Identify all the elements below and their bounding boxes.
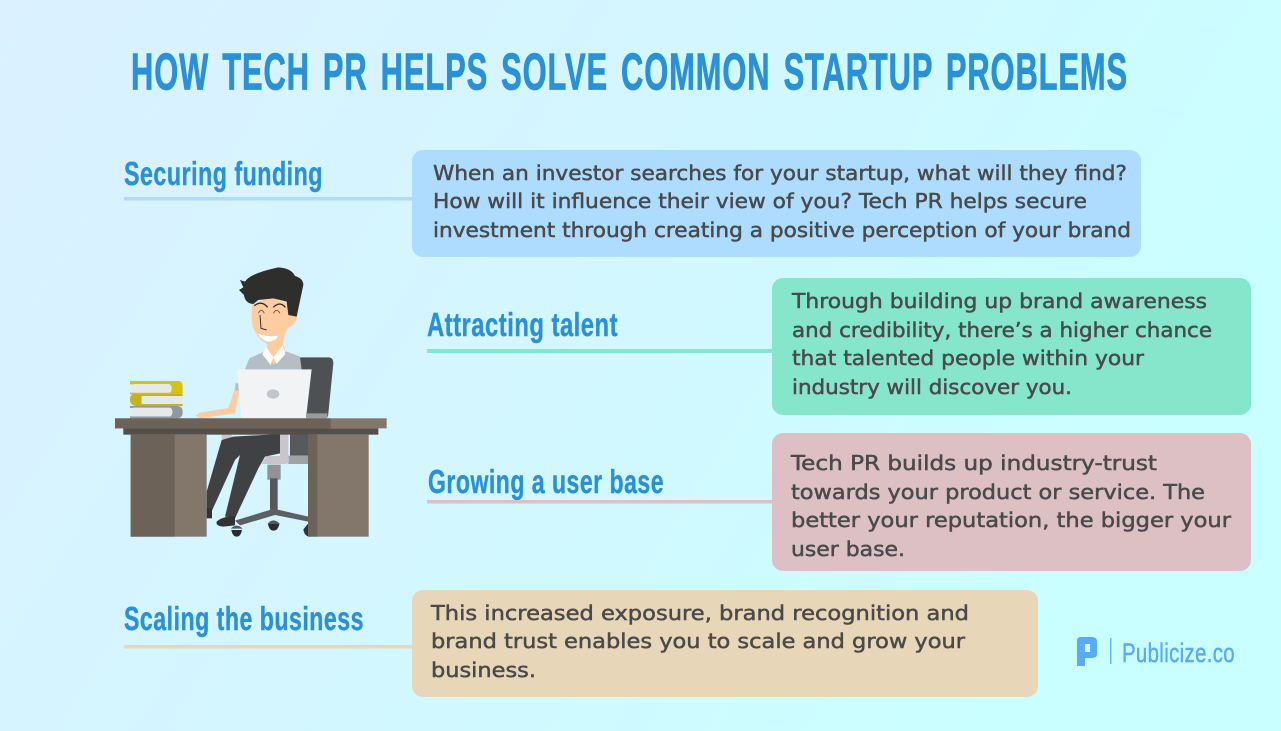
box: attracting talent <box>772 278 1251 415</box>
text: growing a user base: user base. <box>791 537 905 561</box>
panel: scaling the business <box>124 590 1038 697</box>
text: growing a user base <box>790 451 1232 561</box>
torso <box>245 352 302 383</box>
text: growing a user base: Tech PR builds up industry-trust <box>790 451 1157 475</box>
heading: attracting talent: Attracting talent <box>427 306 618 343</box>
books <box>130 381 183 418</box>
desk <box>115 418 387 537</box>
icon: P mark <box>1077 637 1097 666</box>
text: growing a user base: towards your product or service. The <box>791 480 1205 504</box>
text: securing funding <box>433 161 1131 242</box>
box: growing a user base <box>772 433 1251 571</box>
chair base <box>222 434 308 537</box>
text: attracting talent: Through building up brand awareness <box>791 289 1207 313</box>
illustration: man working at desk <box>115 267 387 537</box>
chair back <box>300 357 333 417</box>
arm <box>195 385 239 418</box>
panel: attracting talent <box>427 278 1251 415</box>
text: securing funding: When an investor searches for your startup, what will they find? <box>433 161 1127 185</box>
text: securing funding: How will it influence their view of you? Tech PR helps secure <box>433 189 1087 213</box>
wordmark: Publicize.co <box>1122 638 1235 668</box>
laptop <box>237 369 312 418</box>
heading: growing a user base: Growing a user base <box>428 463 664 500</box>
text: growing a user base: better your reputation, the bigger your <box>791 508 1232 532</box>
box: securing funding <box>412 150 1141 257</box>
text: scaling the business: business. <box>431 658 536 682</box>
heading: securing funding: Securing funding <box>124 155 323 192</box>
box: scaling the business <box>412 590 1038 697</box>
text: securing funding: investment through creating a positive perception of your brand <box>433 218 1131 242</box>
panel: growing a user base <box>427 433 1251 571</box>
panel: securing funding <box>124 150 1141 257</box>
heading: scaling the business: Scaling the business <box>124 600 364 637</box>
text: scaling the business <box>430 601 969 682</box>
text: scaling the business: This increased exposure, brand recognition and <box>430 601 969 625</box>
hair <box>239 267 303 317</box>
logo: Publicize.co <box>1077 637 1235 668</box>
text: attracting talent: industry will discover you. <box>792 375 1072 399</box>
text: scaling the business: brand trust enables you to scale and grow your <box>431 629 966 653</box>
text: attracting talent <box>791 289 1212 399</box>
head <box>252 297 297 349</box>
text: attracting talent: and credibility, there’s a higher chance <box>792 318 1212 342</box>
legs <box>207 434 280 518</box>
text: attracting talent: that talented people within your <box>792 346 1145 370</box>
